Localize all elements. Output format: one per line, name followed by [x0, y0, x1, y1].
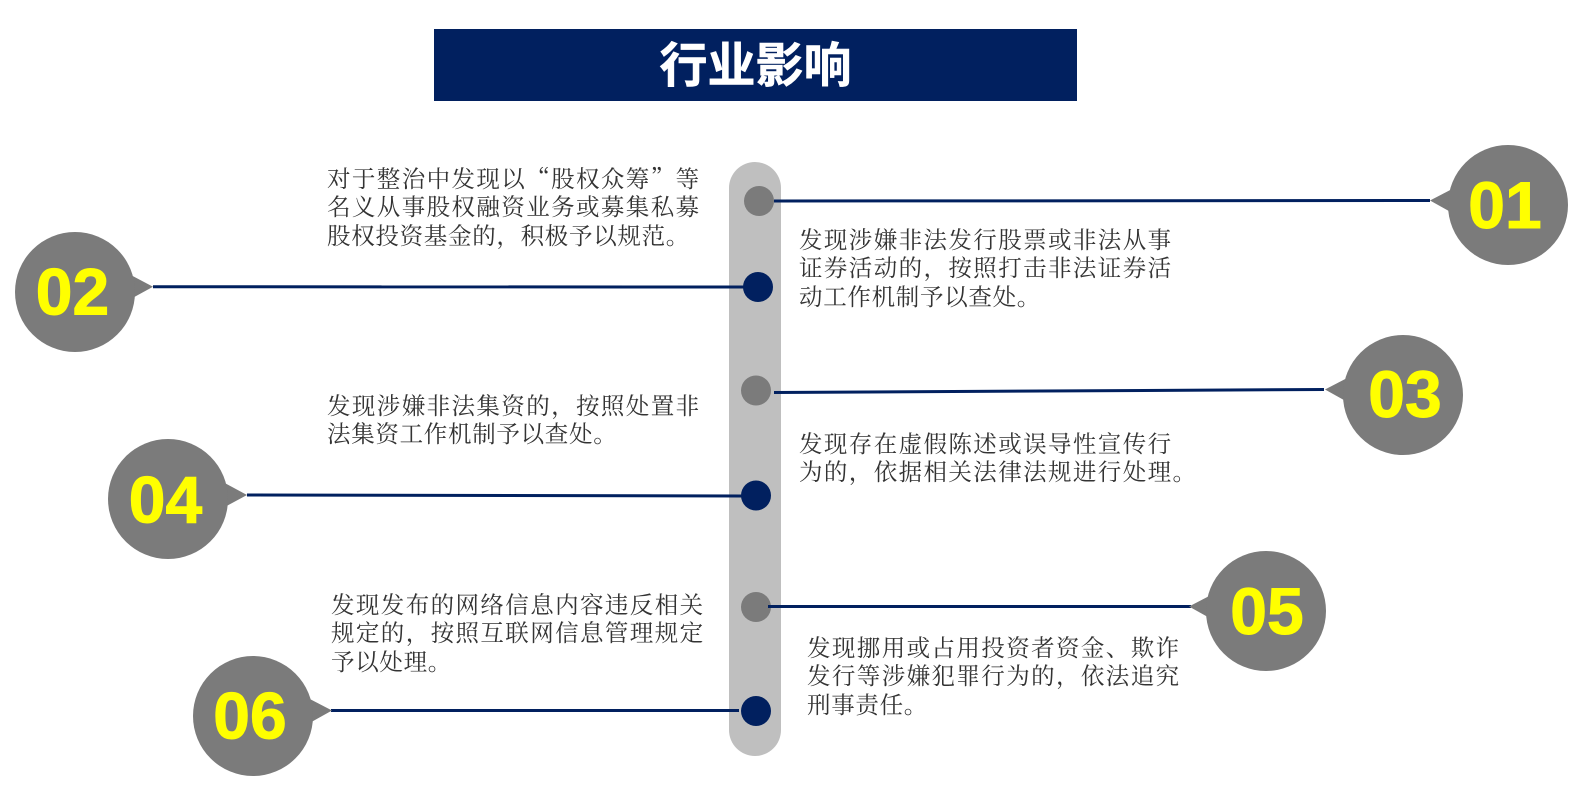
text block: item 02: 名义从事股权融资业务或募集私募 [327, 188, 700, 222]
item 05 connector [741, 592, 1191, 622]
item 01 connector [744, 186, 1430, 216]
text block: item 01: 发现涉嫌非法发行股票或非法从事 [799, 221, 1172, 255]
title [434, 29, 1077, 101]
text block: item 04: 法集资工作机制予以查处。 [327, 415, 617, 449]
item 03 connector [741, 376, 1324, 406]
text block: item 04 [327, 387, 700, 449]
badge 05: 05 [1230, 574, 1304, 648]
text block: item 05: 发行等涉嫌犯罪行为的，依法追究 [807, 657, 1180, 691]
badge 02 [15, 232, 153, 352]
text block: item 04: 发现涉嫌非法集资的，按照处置非 [327, 387, 700, 421]
badge 05 [1189, 551, 1326, 671]
title: 行业影响 [659, 40, 852, 93]
vertical track [729, 162, 781, 756]
text block: item 06: 发现发布的网络信息内容违反相关 [331, 586, 704, 620]
text block: item 01 [799, 221, 1172, 312]
text block: item 01: 动工作机制予以查处。 [799, 278, 1041, 312]
item 02 connector [153, 272, 773, 302]
text block: item 02 [327, 160, 700, 251]
text block: item 02: 对于整治中发现以“股权众筹”等 [327, 160, 700, 194]
badge 04: 04 [129, 462, 202, 536]
text block: item 01: 证券活动的，按照打击非法证券活 [799, 249, 1172, 283]
text block: item 05: 刑事责任。 [807, 686, 928, 720]
badge 04 [108, 439, 247, 559]
text block: item 03: 发现存在虚假陈述或误导性宣传行 [799, 425, 1172, 459]
text block: item 06 [331, 586, 704, 677]
text block: item 05 [807, 629, 1180, 720]
badge 06 [193, 656, 332, 776]
text block: item 06: 规定的，按照互联网信息管理规定 [331, 614, 704, 648]
item 04 connector [247, 480, 771, 510]
text block: item 05: 发现挪用或占用投资者资金、欺诈 [807, 629, 1180, 663]
item 06 connector [331, 696, 771, 726]
text block: item 02: 股权投资基金的，积极予以规范。 [327, 217, 690, 251]
badge 06: 06 [213, 678, 287, 752]
badge 01: 01 [1468, 168, 1542, 242]
badge 01 [1430, 145, 1568, 265]
badge 03 [1325, 335, 1463, 455]
badge 02: 02 [36, 254, 109, 328]
text block: item 03: 为的，依据相关法律法规进行处理。 [799, 453, 1197, 487]
text block: item 03 [799, 425, 1197, 487]
badge 03: 03 [1368, 357, 1442, 431]
text block: item 06: 予以处理。 [331, 643, 452, 677]
